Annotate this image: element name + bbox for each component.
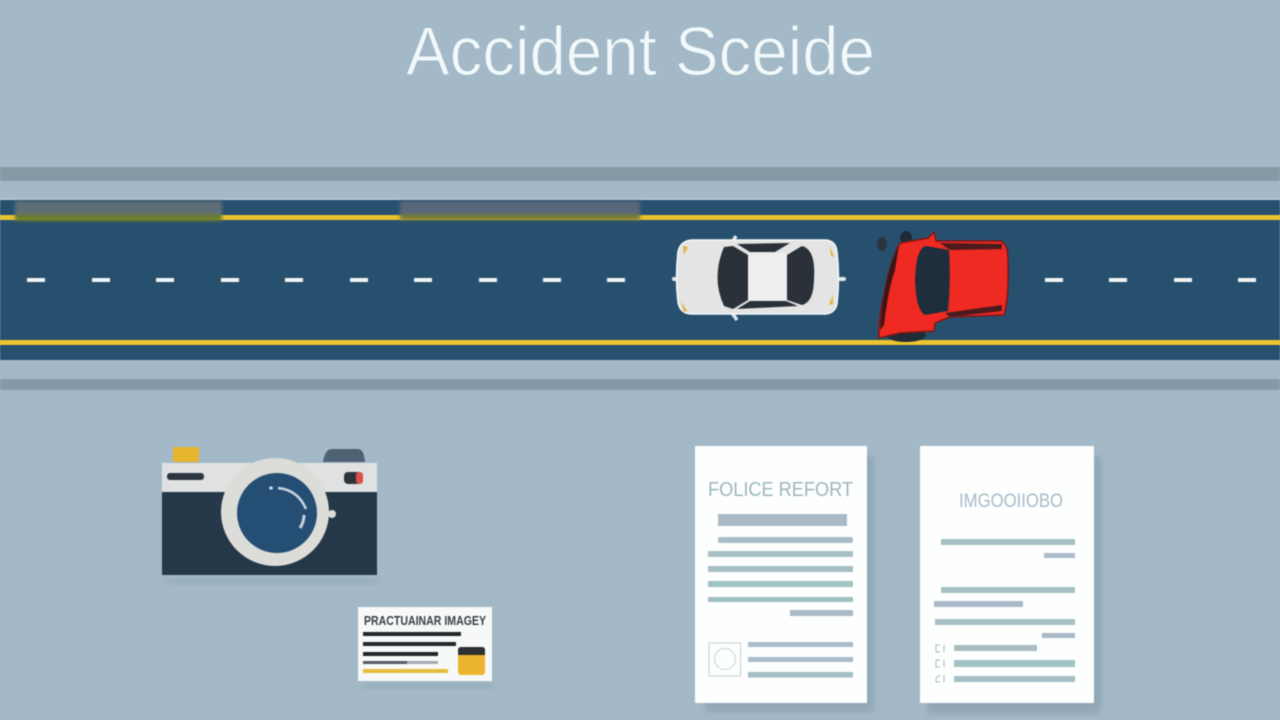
card heading: PRACTUAINAR IMAGEY	[364, 613, 486, 628]
text lines	[708, 537, 853, 616]
upper roadside band	[0, 167, 1280, 181]
lower roadside band	[0, 379, 1280, 390]
camera	[162, 447, 380, 584]
upper yellow line	[0, 215, 1280, 220]
skid smudge left	[15, 201, 222, 221]
stamp lines	[748, 642, 853, 678]
document heading: IMGOOIIOBO	[959, 491, 1063, 512]
card badge	[458, 647, 485, 675]
card lines	[363, 632, 461, 673]
top plate	[162, 463, 377, 492]
ID card	[358, 607, 494, 689]
red car	[877, 231, 1008, 342]
lane dashes	[27, 278, 1256, 282]
lower yellow line	[0, 340, 1280, 345]
stamp	[709, 643, 740, 676]
shutter button	[173, 447, 199, 462]
camera shadow	[166, 578, 380, 584]
text lines	[934, 539, 1075, 638]
skid smudge right	[400, 201, 640, 220]
checklist	[936, 645, 1075, 682]
road	[0, 198, 1280, 360]
strap slot	[167, 473, 204, 480]
heading bar	[718, 514, 847, 526]
indicator	[344, 472, 363, 484]
white car	[672, 236, 846, 320]
body	[162, 492, 377, 575]
title: Accident Sceide	[406, 13, 875, 90]
viewfinder hump	[323, 449, 365, 462]
police report document	[695, 446, 874, 712]
second document	[920, 446, 1101, 714]
document heading: FOLICE REFORT	[708, 478, 853, 501]
lens	[221, 458, 329, 566]
